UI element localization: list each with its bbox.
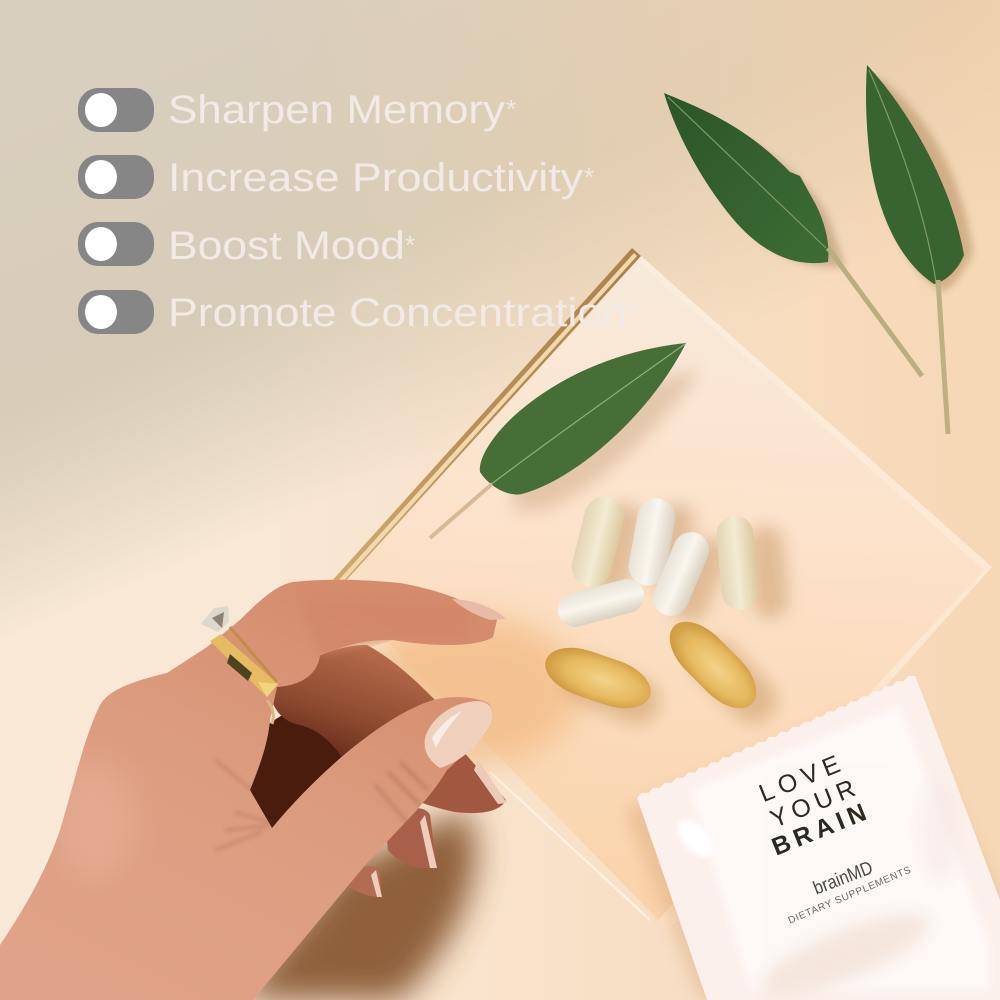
toggle row: boost mood: Boost Mood [168,224,405,268]
hand crease lines [215,760,272,850]
dark palm interior [245,690,430,835]
toggle row: increase productivity: * [584,162,594,192]
back fingers [347,720,507,897]
benefits list [78,88,638,335]
thumb knuckle creases [375,762,428,825]
text: LOVE YOUR BRAIN [755,748,875,861]
toggle row: boost mood [78,222,415,268]
panel: supplement packet [625,676,1000,1000]
toggle row: sharpen memory: Sharpen Memory [168,88,505,132]
softgel 2 [658,610,768,720]
index finger shade [320,640,392,655]
index fingernail [452,599,506,620]
logo: brainMD: brainMD [810,858,876,899]
toggle row: sharpen memory: * [506,94,516,124]
capsule 2 [626,495,678,589]
softgel 1 [539,638,657,718]
text: LOVE YOUR BRAIN: LOVE [755,748,850,808]
text: LOVE YOUR BRAIN: BRAIN [768,796,875,861]
panel: acrylic plate [330,248,992,930]
capsule shadows [557,500,790,732]
icon: sage leaf top left [664,93,922,376]
hand shadow [235,810,476,1000]
text: LOVE YOUR BRAIN: YOUR [766,772,864,834]
capsule 1 [567,493,629,591]
icon: sage leaf on plate [430,343,700,538]
icon: gold rings [201,606,278,724]
curled finger [270,645,435,765]
palm and thumb [0,580,497,1000]
capsule 3 [647,526,715,622]
icon: hand [0,580,507,1000]
toggle row: boost mood: * [405,230,415,260]
capsule 4 [715,515,760,611]
icon: sage leaf top right [866,65,973,434]
toggle row: increase productivity: Increase Productivity [168,156,583,200]
toggle row: promote concentration: Promote Concentration [168,291,627,335]
capsule 5 [554,575,648,631]
icon: diamond [201,606,229,632]
text: dietary supplements: DIETARY SUPPLEMENTS [787,864,914,927]
light patch on back of hand [63,770,128,867]
capsules [539,493,790,732]
toggle row: promote concentration: * [628,297,638,327]
thumb nail [425,701,492,768]
